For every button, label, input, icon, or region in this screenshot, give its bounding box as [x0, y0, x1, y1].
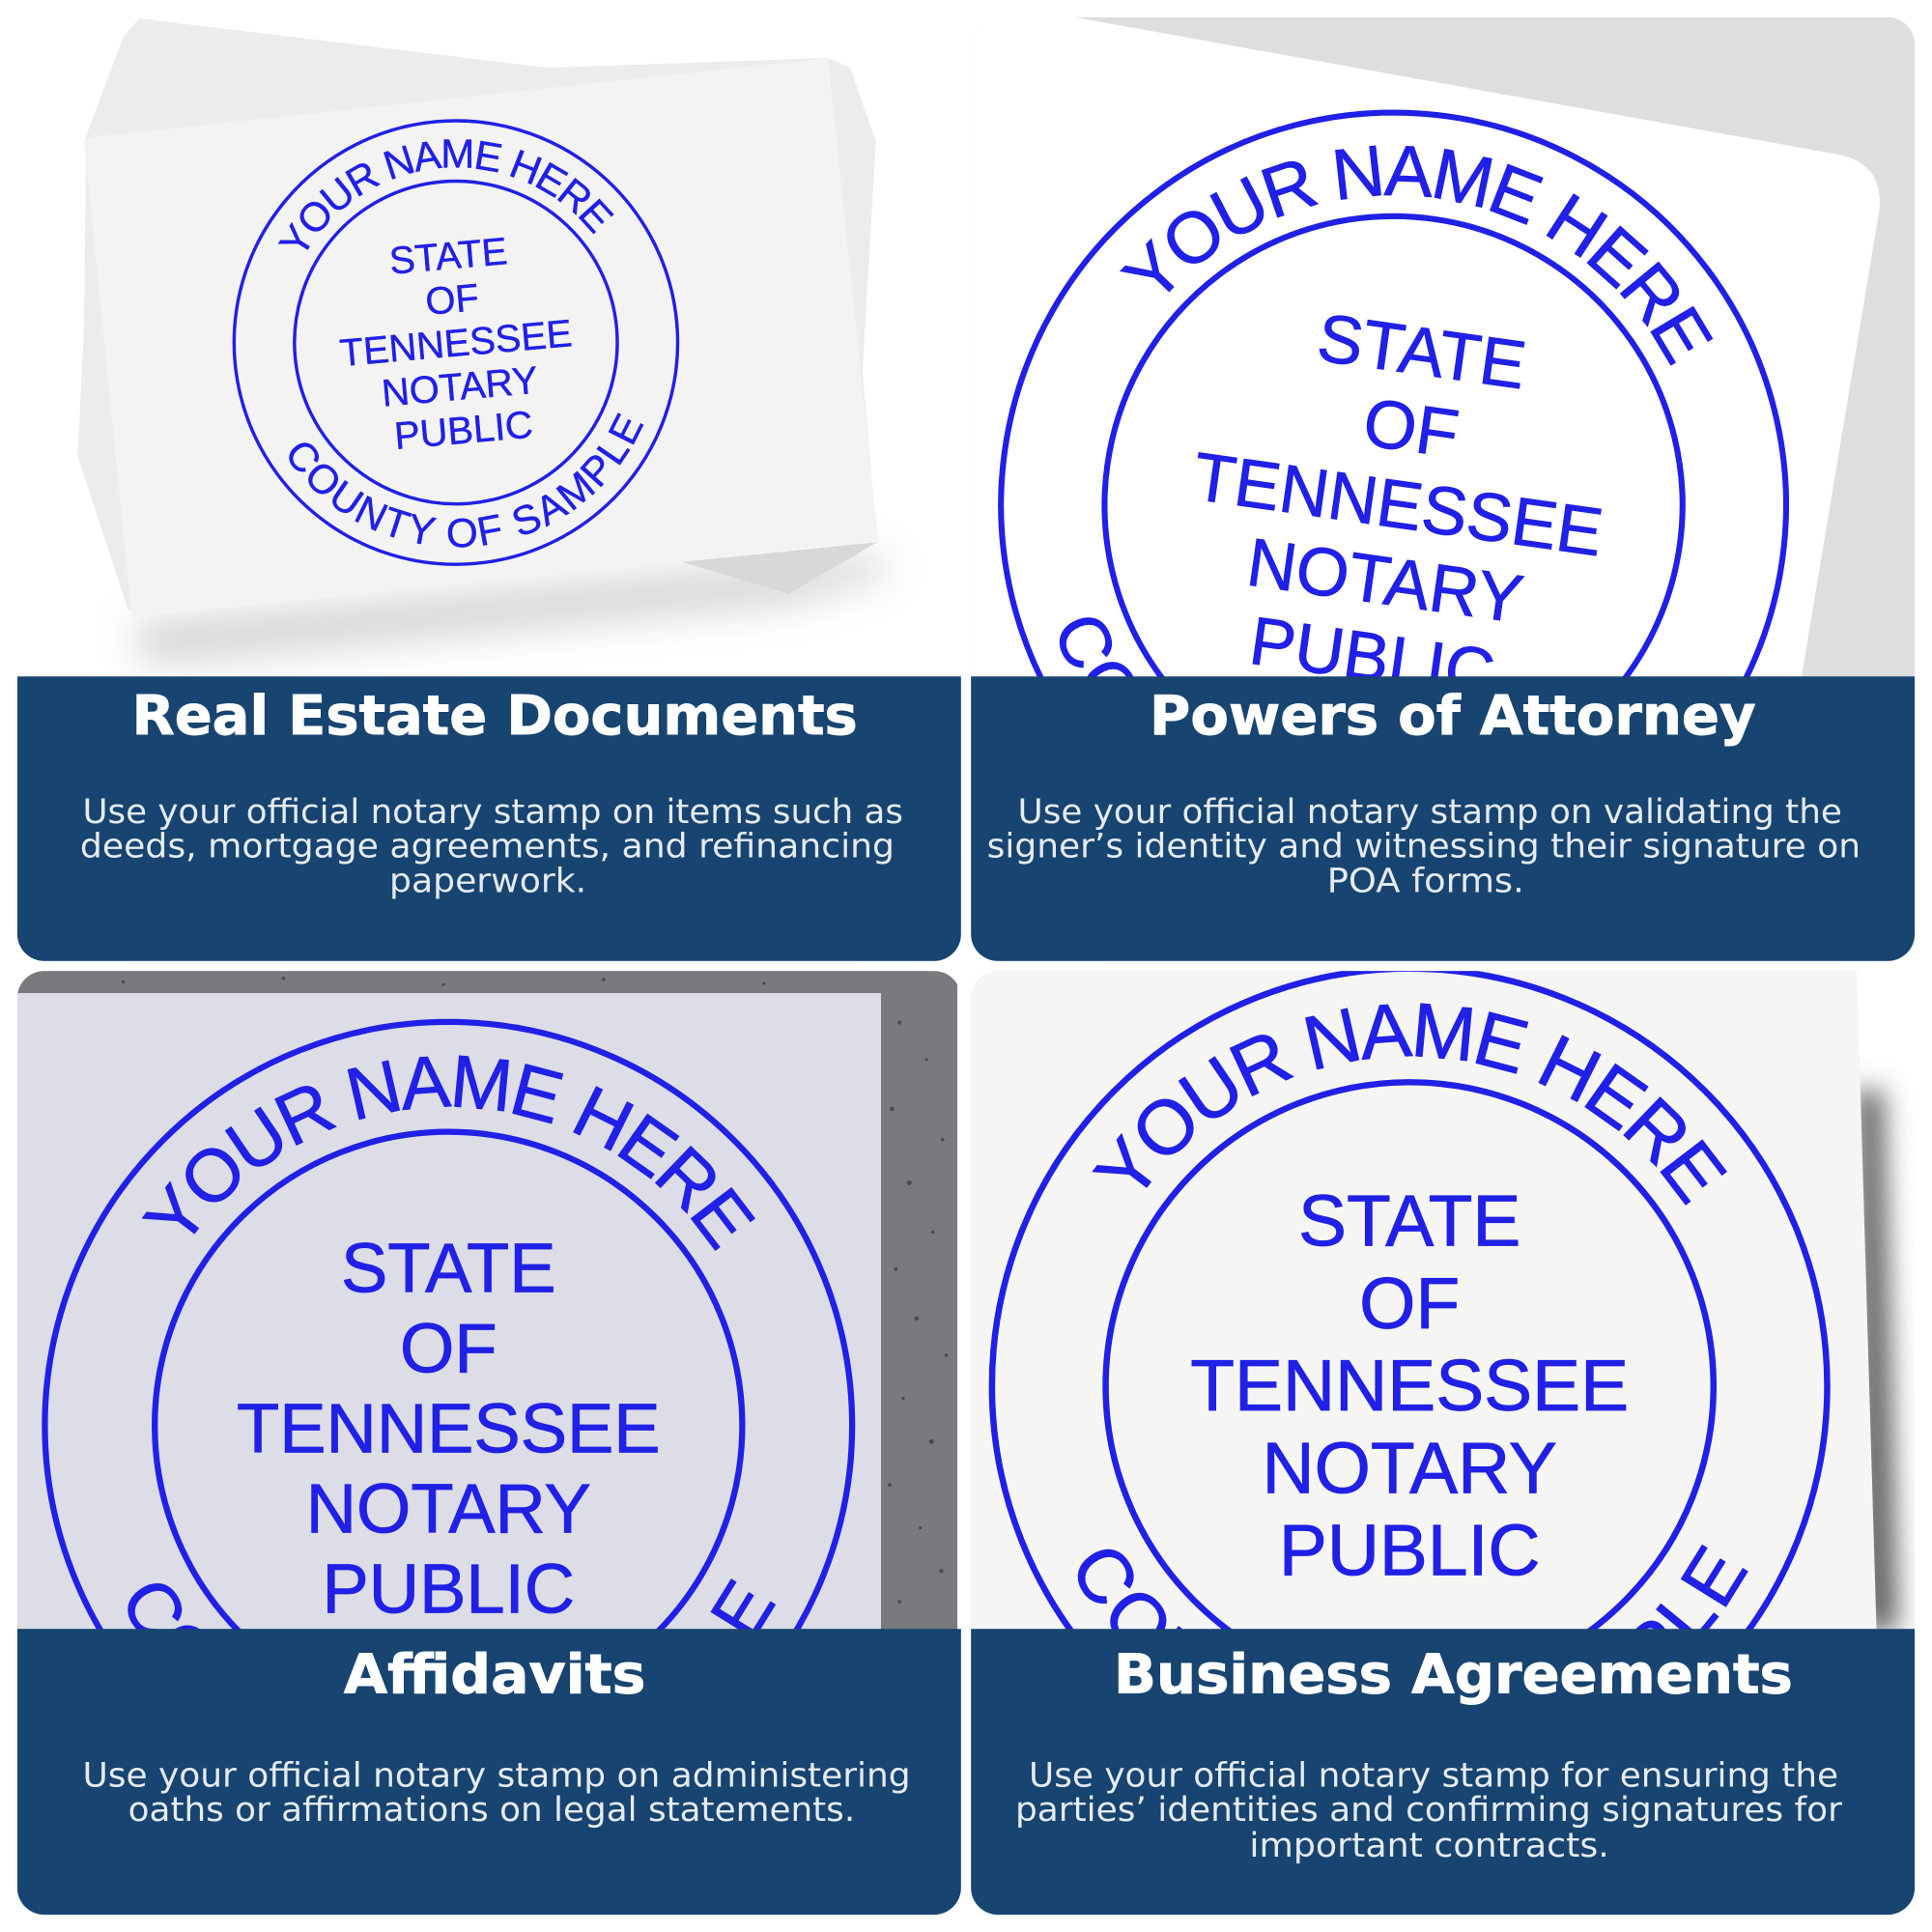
heading: Affidavits: [344, 1644, 645, 1707]
stamp impression: OF: [1359, 1263, 1460, 1344]
stamp impression: STATE: [341, 1230, 556, 1308]
stamp impression: [42, 1018, 856, 1629]
stamp impression: OF: [1359, 384, 1463, 472]
stamp impression: NOTARY: [306, 1469, 591, 1548]
panel: business agreements: [971, 971, 1915, 1915]
stamp impression: NOTARY: [1263, 1427, 1557, 1508]
description: Use your official notary stamp on items such as: [82, 793, 903, 832]
caption band: [971, 676, 1915, 961]
stamp impression: COUNTY OF SAMPLE: [289, 412, 643, 548]
stamp impression: YOUR NAME HERE: [278, 139, 614, 250]
photo: stamped paper with shadow: [972, 971, 1915, 1629]
stamp impression: PUBLIC: [392, 404, 534, 458]
photo: angled stamped paper: [998, 17, 1915, 676]
panel: affidavits: [17, 971, 961, 1915]
photo: stack of stamped cards: [77, 18, 891, 676]
stamp impression: TENNESSEE: [1190, 1345, 1629, 1426]
stamp impression: NOTARY: [1242, 524, 1528, 638]
stamp impression: [998, 110, 1789, 676]
stamp impression: OF: [424, 276, 481, 324]
description: [82, 1756, 911, 1830]
stamp impression: STATE: [387, 230, 509, 283]
description: [80, 793, 903, 900]
photo: stamped paper on concrete: [17, 971, 958, 1631]
description: [989, 798, 1858, 893]
heading: Real Estate Documents: [131, 685, 858, 748]
description: paperwork.: [389, 862, 586, 900]
stamp impression: TENNESSEE: [237, 1390, 661, 1468]
description: deeds, mortgage agreements, and refinancing: [80, 828, 895, 867]
stamp impression: STATE: [1298, 1180, 1520, 1262]
caption band: [17, 1629, 961, 1915]
description: Use your official notary stamp on validating the: [1018, 793, 1842, 832]
stamp impression: OF: [400, 1310, 497, 1388]
description: parties’ identities and confirming signatures for: [1015, 1791, 1843, 1830]
stamp impression: COUNTY OF SAMPLE: [128, 1578, 777, 1629]
stamp impression: PUBLIC: [1245, 602, 1499, 712]
stamp impression: [989, 971, 1831, 1629]
stamp impression: STATE: [1313, 298, 1531, 403]
heading: Powers of Attorney: [1150, 685, 1756, 748]
stamp impression: NOTARY: [380, 359, 540, 415]
stamp impression: COUNTY OF SAMPLE: [1078, 1544, 1748, 1629]
stamp impression: TENNESSEE: [1189, 438, 1607, 570]
description: oaths or affirmations on legal statements.: [128, 1791, 855, 1830]
stamp impression: TENNESSEE: [338, 312, 574, 375]
description: important contracts.: [1249, 1827, 1609, 1865]
description: Use your official notary stamp on administering: [82, 1756, 911, 1795]
stamp impression: PUBLIC: [323, 1549, 575, 1628]
description: Use your official notary stamp for ensuring the: [1029, 1756, 1838, 1795]
stamp impression: YOUR NAME HERE: [1092, 1003, 1727, 1206]
stamp impression: [232, 119, 680, 566]
stamp impression: COUNTY OF SAMPLE: [1059, 617, 1134, 676]
panel: powers of attorney: [971, 17, 1915, 961]
panel: real estate documents: [17, 18, 961, 961]
heading: Business Agreements: [1114, 1644, 1793, 1707]
description: POA forms.: [1327, 862, 1524, 900]
stamp impression: YOUR NAME HERE: [141, 1055, 755, 1251]
stamp impression: YOUR NAME HERE: [1120, 145, 1714, 366]
description: signer’s identity and witnessing their signature on: [987, 828, 1861, 867]
caption band: [971, 1629, 1915, 1915]
stamp impression: PUBLIC: [1279, 1510, 1541, 1591]
caption band: [17, 676, 961, 961]
description: [1015, 1756, 1843, 1865]
